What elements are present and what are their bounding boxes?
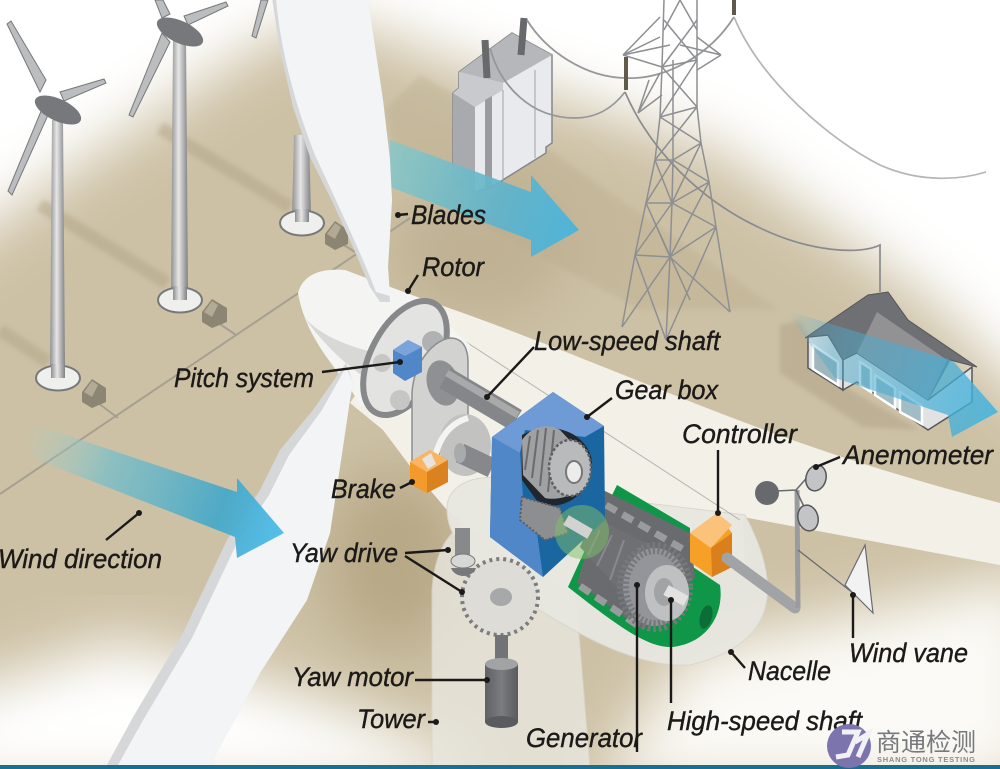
generator rotor [580, 517, 689, 626]
blade: upper [272, 0, 392, 302]
control boxes [82, 221, 348, 408]
arrow: power flow to house [785, 310, 998, 437]
arrow: power flow past transformer [390, 140, 579, 257]
label: Wind direction: Wind direction [0, 544, 162, 574]
rotor ring [346, 287, 464, 429]
label: Wind vane: Wind vane [849, 638, 968, 668]
logo: Shang Tong Testing: SHANG TONG TESTING [877, 755, 975, 764]
turbine: far background [252, 0, 324, 236]
yaw drive gears [451, 528, 538, 635]
brake caliper [410, 450, 448, 493]
label: High-speed shaft: High-speed shaft [667, 706, 863, 736]
label: Tower: Tower [357, 704, 426, 734]
label: Anemometer: Anemometer [841, 440, 994, 470]
house [805, 292, 977, 430]
label: Brake: Brake [331, 474, 396, 504]
brake disc [434, 414, 492, 476]
tower shell [432, 516, 590, 768]
generator housing [568, 485, 721, 647]
hub [298, 270, 470, 420]
anemometer mast and cups [727, 463, 829, 608]
bearing plate and low-speed shaft [412, 338, 518, 465]
yaw motor [485, 635, 518, 728]
label: Blades: Blades [411, 200, 486, 230]
label: Gear box: Gear box [615, 375, 719, 405]
label: Generator: Generator [526, 723, 643, 753]
transmission pylon [622, 0, 986, 340]
logo: Shang Tong Testing [827, 724, 976, 768]
label: Yaw motor: Yaw motor [292, 662, 414, 692]
blade: lower [107, 363, 353, 765]
turbine: far left [7, 21, 106, 390]
controller box [690, 513, 732, 577]
label: Pitch system: Pitch system [174, 363, 314, 393]
label: Yaw drive: Yaw drive [290, 538, 398, 568]
arrow: wind direction [30, 423, 284, 558]
nacelle shell [447, 477, 768, 665]
leader lines [106, 212, 856, 752]
transformer [453, 17, 734, 192]
label: Nacelle: Nacelle [748, 656, 831, 686]
turbine: middle [129, 0, 228, 312]
gear box [490, 392, 609, 577]
label: Controller: Controller [682, 419, 798, 449]
label: Rotor: Rotor [422, 252, 485, 282]
wind vane [798, 545, 873, 613]
pitch system cube [393, 340, 422, 381]
label: Low-speed shaft: Low-speed shaft [534, 326, 721, 356]
logo: Shang Tong Testing: 商通检测 [876, 729, 976, 757]
bottom stripe [0, 765, 1000, 769]
